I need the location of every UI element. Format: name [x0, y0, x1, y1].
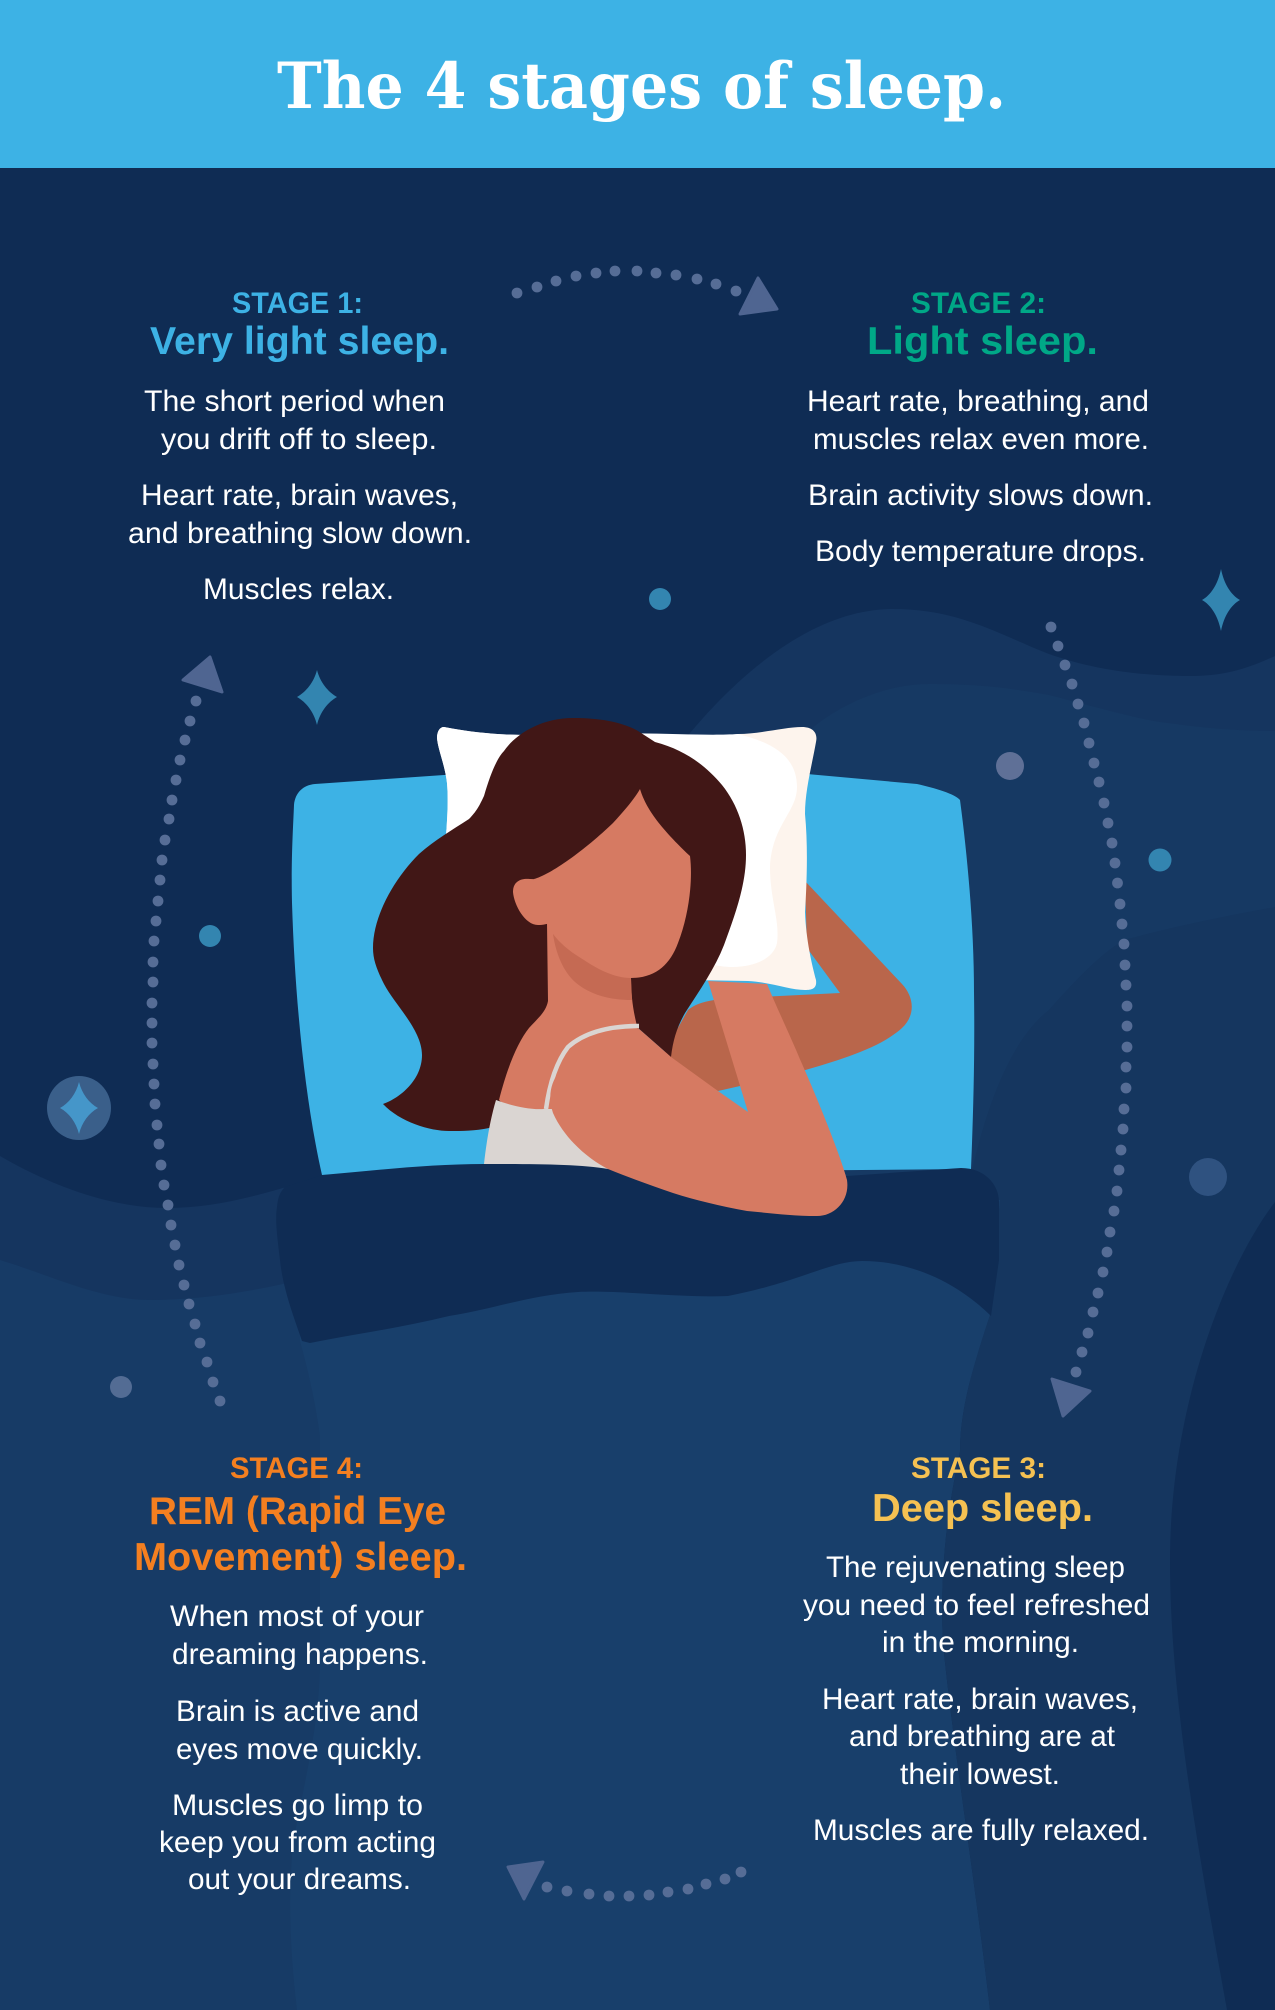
- near upper arm: [550, 1000, 847, 1216]
- stage 4 description: Brain is active and: [176, 1695, 419, 1728]
- ear: [513, 879, 560, 925]
- stage 1 description: you drift off to sleep.: [161, 423, 437, 456]
- decorative dots: [110, 588, 1227, 1398]
- stage 2 description: Body temperature drops.: [815, 535, 1146, 568]
- stage 4 description: keep you from acting: [159, 1826, 436, 1859]
- stage 3 description: The rejuvenating sleep: [826, 1551, 1125, 1584]
- pillow: [437, 727, 816, 990]
- stage 4 heading: [134, 1490, 467, 1579]
- face: [534, 789, 691, 978]
- stage 2 label: STAGE 2:: [911, 287, 1046, 320]
- stage 1 description: Muscles relax.: [203, 573, 394, 606]
- stage 1 label: STAGE 1:: [232, 287, 363, 320]
- stage 2 description: muscles relax even more.: [813, 423, 1149, 456]
- bed sheet: [292, 774, 974, 1175]
- stage 4 label: STAGE 4:: [230, 1452, 363, 1485]
- hair: [373, 718, 746, 1131]
- stage 2 heading: Light sleep.: [867, 320, 1098, 363]
- stage 1 description: The short period when: [144, 385, 445, 418]
- stage 3 description: [803, 1551, 1150, 1847]
- title: The 4 stages of sleep.: [277, 49, 1006, 124]
- stage 3 label: STAGE 3:: [911, 1452, 1046, 1485]
- near forearm: [708, 981, 847, 1180]
- stage 2 description: Brain activity slows down.: [808, 479, 1153, 512]
- stage 4 description: out your dreams.: [188, 1863, 411, 1896]
- stage 4 description: eyes move quickly.: [176, 1733, 423, 1766]
- stage 1 description: [128, 385, 472, 606]
- stage 3 heading: Deep sleep.: [872, 1487, 1093, 1530]
- header banner: [0, 0, 1275, 168]
- stage 3 description: their lowest.: [900, 1758, 1060, 1791]
- stage 4 description: [159, 1600, 436, 1896]
- stage 1 heading: Very light sleep.: [150, 320, 449, 363]
- icon: sparkle in circle: [47, 1076, 111, 1140]
- stage 3 description: in the morning.: [882, 1626, 1079, 1659]
- arrow: stage 2 to stage 3: [1046, 622, 1132, 1416]
- illustration: woman sleeping in bed: [276, 718, 999, 1343]
- tank top strap: [546, 1026, 639, 1109]
- blanket: [276, 1164, 999, 1343]
- stage 2 description: Heart rate, breathing, and: [807, 385, 1149, 418]
- panel: stage 4: [134, 1452, 467, 1896]
- stage 4 description: When most of your: [170, 1600, 424, 1633]
- icon: sparkle upper left: [297, 670, 337, 725]
- stage 4 heading: Movement) sleep.: [134, 1536, 467, 1579]
- stage 4 heading: REM (Rapid Eye: [149, 1490, 446, 1533]
- panel: stage 2: [807, 287, 1153, 568]
- far arm: [660, 881, 912, 1091]
- stage 2 description: [807, 385, 1153, 568]
- stage 4 description: dreaming happens.: [172, 1638, 428, 1671]
- stage 3 description: and breathing are at: [849, 1720, 1115, 1753]
- stage 3 description: Heart rate, brain waves,: [822, 1683, 1138, 1716]
- icon: sparkle top right: [1202, 569, 1240, 631]
- panel: stage 3: [803, 1452, 1150, 1847]
- arrow: stage 3 to stage 4: [508, 1862, 746, 1901]
- stage 1 description: and breathing slow down.: [128, 517, 472, 550]
- stage 3 description: you need to feel refreshed: [803, 1589, 1150, 1622]
- stage 4 description: Muscles go limp to: [172, 1789, 423, 1822]
- panel: stage 1: [128, 287, 472, 606]
- neck and chest: [499, 923, 640, 1160]
- arrow: stage 1 to stage 2: [512, 266, 777, 314]
- neck shadow: [553, 934, 632, 1000]
- stage 1 description: Heart rate, brain waves,: [141, 479, 458, 512]
- stage 3 description: Muscles are fully relaxed.: [813, 1814, 1149, 1847]
- tank top: [484, 1100, 608, 1169]
- arrow: stage 4 to stage 1: [147, 657, 225, 1406]
